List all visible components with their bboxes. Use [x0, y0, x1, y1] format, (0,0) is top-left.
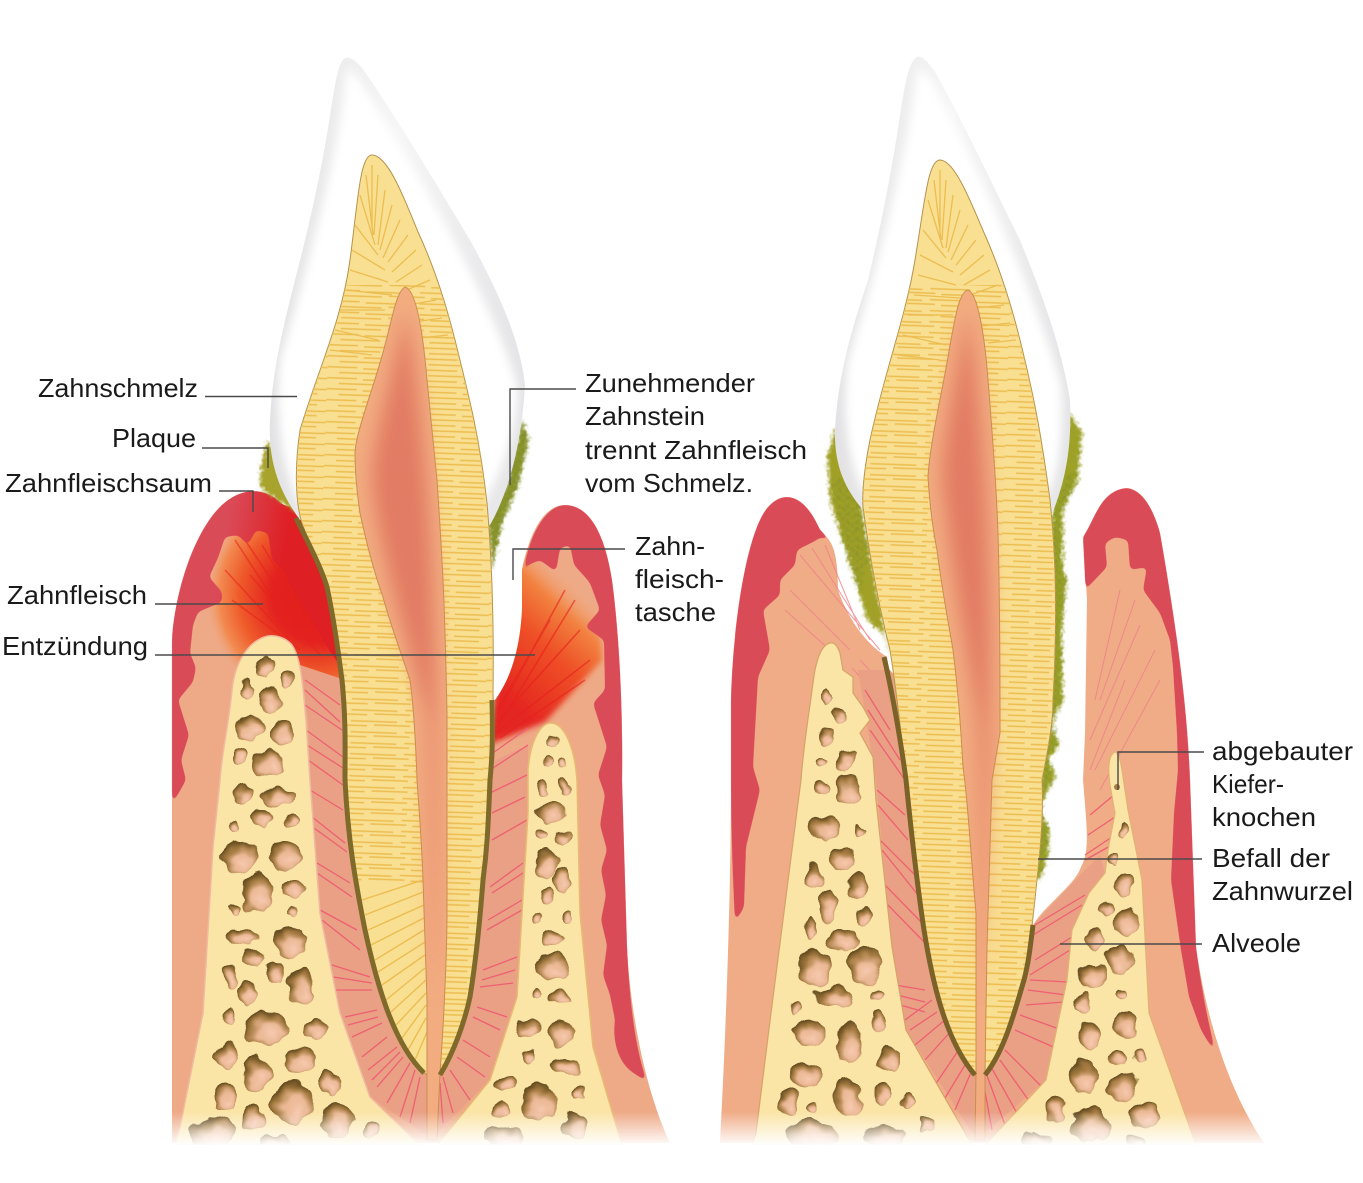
label: Zahnschmelz: Zahnschmelz — [38, 373, 198, 403]
alveolus — [300, 665, 528, 1133]
tartar right — [487, 420, 529, 570]
labels centre: trennt Zahnfleisch — [585, 435, 807, 465]
enamel highlight — [846, 68, 1062, 495]
alveolus — [858, 670, 1105, 1133]
illustration: tooth with advanced periodontitis — [720, 57, 1264, 1148]
jaw bone right — [985, 752, 1196, 1145]
pulp — [355, 287, 447, 1140]
plaque left — [260, 440, 300, 515]
leader line: Zahnfleischsaum — [219, 491, 253, 512]
label: Befall der Zahnwurzel: Befall der — [1212, 843, 1330, 873]
leader line: Zahnfleischtasche — [513, 549, 625, 580]
gum base — [720, 488, 1264, 1143]
label: Zahnfleischtasche: Zahn- — [635, 531, 705, 561]
red gum margin right — [1083, 488, 1217, 1057]
bottom mask — [160, 1145, 1280, 1159]
red gum margin left — [731, 497, 834, 923]
bone cavities right tooth — [780, 688, 1160, 1148]
leader line: Zahnschmelz — [205, 396, 297, 398]
label: Alveole: Alveole — [1212, 928, 1301, 958]
jaw bone left — [752, 643, 972, 1145]
label: Zahnfleischsaum: Zahnfleischsaum — [5, 468, 212, 498]
labels right: knochen — [1212, 802, 1316, 832]
labels centre: tasche — [635, 597, 716, 627]
enamel — [270, 58, 525, 525]
inflammation right — [488, 550, 602, 745]
dentin tubules — [296, 165, 494, 1066]
red gum margin left — [172, 491, 350, 805]
illustration: tooth with early periodontitis — [172, 58, 670, 1149]
bone cavity: resorbed tip — [1114, 784, 1120, 790]
label: abgebauter Kieferknochen: abgebauter — [1212, 736, 1353, 766]
dentin — [863, 160, 1056, 1075]
leader line: Zahnfleisch — [155, 603, 263, 605]
label: Entzündung: Entzündung — [2, 631, 148, 661]
periodontal fibres — [865, 690, 1120, 1130]
periodontal fibres — [305, 680, 528, 1123]
labels centre: vom Schmelz. — [585, 468, 753, 498]
tartar left — [827, 428, 890, 660]
label: Zunehmender Zahnstein: Zunehmender — [585, 368, 755, 398]
jaw bone right — [437, 723, 622, 1145]
labels centre — [510, 368, 807, 627]
jaw bone left — [175, 636, 420, 1145]
leader line: Plaque — [202, 448, 268, 468]
enamel — [835, 57, 1070, 512]
labels centre: Zahnstein — [585, 401, 705, 431]
gum base — [172, 491, 670, 1143]
periodontal membrane — [296, 518, 492, 1075]
tartar right — [1035, 413, 1082, 880]
dentin — [296, 155, 494, 1075]
labels left — [2, 373, 535, 661]
labels right: Zahnwurzel — [1212, 876, 1353, 906]
pulp — [928, 290, 1000, 1140]
leader line: Zahnstein — [510, 389, 576, 485]
leader line: Alveole — [1060, 943, 1202, 945]
pulp core — [942, 310, 990, 1000]
periodontal membrane — [884, 657, 1033, 1075]
dentin tubules — [862, 170, 1056, 1068]
labels centre: fleisch- — [635, 564, 724, 594]
label: Plaque: Plaque — [112, 423, 196, 453]
enamel highlight — [279, 68, 517, 505]
bottom fade — [160, 1112, 1280, 1146]
label: Zahnfleisch: Zahnfleisch — [7, 580, 147, 610]
leader line: Kieferknochen — [1118, 752, 1204, 790]
red gum margin right — [522, 505, 647, 1082]
bone cavities left tooth — [190, 659, 588, 1149]
labels right — [1038, 736, 1353, 958]
leader line: Entzündung — [155, 654, 535, 656]
labels right: Kiefer- — [1212, 769, 1284, 799]
pulp core — [372, 310, 437, 1000]
inflammation left — [210, 502, 340, 678]
leader line: Befall — [1038, 858, 1202, 860]
gum fibres — [785, 545, 1160, 790]
